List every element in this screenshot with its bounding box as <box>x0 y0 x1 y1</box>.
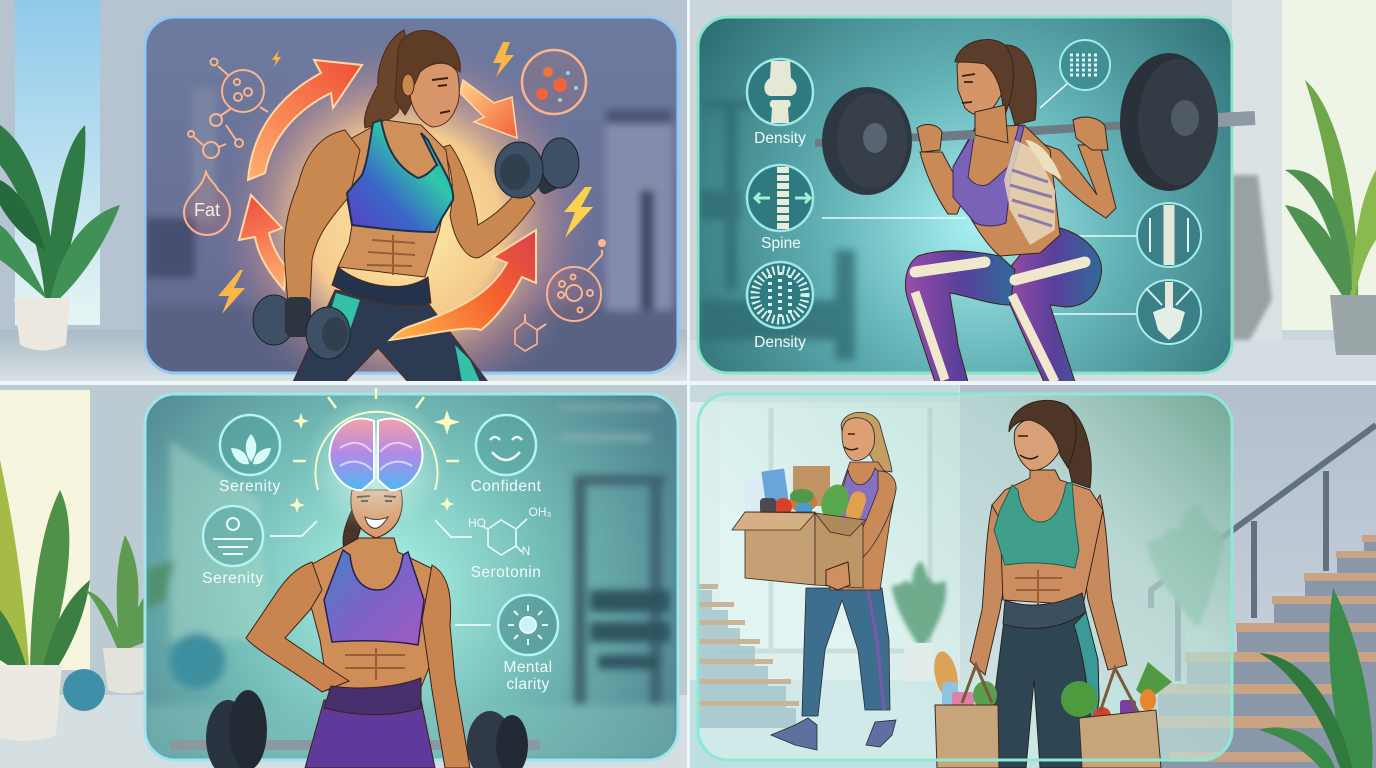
background: gym top left <box>0 0 688 382</box>
icon: fat droplet <box>184 172 230 235</box>
sports top <box>347 120 453 232</box>
stair railing <box>1151 425 1376 681</box>
plant: indoor center <box>892 562 946 645</box>
abs detail <box>367 235 415 275</box>
blurred gym equipment <box>146 51 676 372</box>
torso <box>293 538 447 690</box>
hand under box <box>826 562 850 590</box>
rays <box>293 388 459 461</box>
figure: woman with bags <box>970 400 1127 768</box>
plant pot <box>1330 295 1376 355</box>
bar across shoulders <box>940 128 1080 137</box>
floor <box>690 680 1190 768</box>
label: serenity: Serenity <box>202 570 264 587</box>
stairs right <box>1158 535 1376 768</box>
shoes <box>771 718 896 750</box>
window frame <box>720 408 930 651</box>
left arm <box>284 130 360 305</box>
label: spine: Spine <box>761 235 801 252</box>
icon: lotus serenity <box>219 415 281 495</box>
head <box>957 53 1003 115</box>
figure: woman with box <box>771 412 896 750</box>
groceries in box <box>745 466 868 523</box>
icon: serotonin molecule: HO <box>468 516 486 530</box>
icon: meditation serenity <box>202 506 264 587</box>
plant: top left <box>0 125 120 300</box>
icon: serotonin molecule: OH₃ <box>529 505 552 519</box>
leg stripes <box>325 293 480 382</box>
femurs <box>915 262 1085 280</box>
plant: foreground bottom right <box>1259 588 1373 768</box>
hair <box>1009 400 1076 468</box>
barbell <box>170 690 540 768</box>
legs <box>994 606 1099 768</box>
icon: sun mental clarity: clarity <box>506 676 550 693</box>
abs detail <box>1015 570 1062 605</box>
torso <box>992 470 1103 605</box>
panel border <box>145 394 678 760</box>
icon: compression arrows <box>1137 203 1201 267</box>
icon: cell circle bottom right <box>515 240 605 351</box>
panel border <box>698 394 1232 760</box>
icon: molecule top left <box>188 58 268 158</box>
icon: bone dots <box>1060 40 1110 90</box>
icon: glowing brain <box>289 388 460 532</box>
plant: top right <box>1285 80 1376 300</box>
panel border <box>145 17 678 373</box>
dumbbell: raised <box>495 138 579 198</box>
plant pot <box>14 298 70 350</box>
torso <box>830 462 896 590</box>
arms <box>970 495 1127 675</box>
right leg <box>1005 228 1102 382</box>
icon: serotonin molecule: N <box>522 544 530 558</box>
ponytail <box>1060 403 1091 488</box>
rib lines <box>1010 170 1054 226</box>
hair <box>841 412 892 472</box>
grocery bag left <box>930 649 999 768</box>
arrow: up right <box>248 60 362 180</box>
grocery bag right <box>1061 662 1172 768</box>
figure: smiling woman <box>246 490 470 768</box>
arrow: up left <box>239 195 286 290</box>
smile <box>365 517 388 528</box>
icon: smile confident <box>471 415 542 495</box>
icon: serotonin molecule <box>468 505 552 581</box>
label: confident: Confident <box>471 478 542 495</box>
eye and smile <box>1018 436 1038 459</box>
head <box>351 490 402 538</box>
leader lines <box>822 83 1137 314</box>
panel: mental wellbeing <box>145 388 678 768</box>
ponytail <box>343 510 362 552</box>
dumbbell: lowered <box>253 295 350 359</box>
label: fat: Fat <box>194 200 220 220</box>
eye and mouth <box>432 78 450 113</box>
hair <box>395 30 460 115</box>
face <box>410 63 459 127</box>
plant: indoor right <box>1146 505 1224 625</box>
waistband <box>1003 593 1086 628</box>
ponytail <box>364 30 412 128</box>
panel: everyday strength <box>698 394 1232 768</box>
sports top <box>834 468 882 520</box>
label: density: Density <box>754 130 806 147</box>
plant pot <box>0 665 62 741</box>
label: serenity: Serenity <box>219 478 281 495</box>
background: gym top right <box>690 0 1376 382</box>
label: serotonin: Serotonin <box>471 564 541 581</box>
panel: bone strength <box>698 17 1255 382</box>
label: mental clarity: Mental <box>504 659 552 676</box>
barbell <box>815 53 1255 195</box>
exercise ball <box>63 669 105 711</box>
icon: knee joint density <box>747 59 813 147</box>
sports top <box>324 550 424 645</box>
eyes <box>357 496 396 501</box>
sports top <box>953 125 1024 226</box>
panel: fat burning <box>145 17 678 415</box>
waistband <box>332 267 431 305</box>
sports top <box>994 482 1079 568</box>
icon: pelvis <box>1137 280 1201 344</box>
left leg <box>905 251 1015 382</box>
icon: cell circle top right <box>522 50 586 114</box>
leader lines <box>270 520 491 625</box>
head <box>842 418 874 460</box>
waistband <box>324 678 421 715</box>
eye and smile <box>844 434 858 450</box>
left arm on hip <box>246 562 349 692</box>
tibias <box>915 292 1055 382</box>
blurred gym background <box>145 405 678 760</box>
sparkles <box>289 410 460 513</box>
leg stripe <box>868 590 884 710</box>
abs detail <box>345 648 405 680</box>
legs <box>293 290 488 382</box>
background: gym bottom left <box>0 384 688 768</box>
plants: bottom left <box>0 460 150 680</box>
icon: bone density dots <box>747 262 813 351</box>
hair <box>955 39 1013 117</box>
ribcage <box>1004 140 1055 245</box>
torso <box>330 120 450 277</box>
label: density: Density <box>754 334 806 351</box>
arm <box>830 471 896 580</box>
icon: spine <box>747 165 813 252</box>
teal stripe <box>1074 612 1099 740</box>
right arm down <box>422 565 470 768</box>
stairs left <box>698 584 799 728</box>
cardboard box <box>732 512 865 588</box>
ponytail <box>1005 45 1036 125</box>
window <box>720 408 930 651</box>
treadmill <box>1232 175 1272 340</box>
eye and mouth <box>962 74 975 103</box>
torso <box>953 125 1060 256</box>
legs <box>802 588 890 716</box>
icon: lightning bolts <box>218 42 593 314</box>
neck <box>975 105 1008 143</box>
left forearm <box>920 152 965 214</box>
shoulder bone <box>1025 140 1062 180</box>
right arm <box>1040 143 1116 218</box>
plant pot <box>904 643 933 681</box>
arrow: down right <box>460 80 517 138</box>
ear <box>402 74 414 96</box>
arrow: up right lower <box>390 230 536 340</box>
head <box>1014 417 1060 470</box>
panel border <box>698 17 1232 373</box>
icon: hands on bar <box>917 117 1108 152</box>
right arm <box>440 145 535 258</box>
icon: sun mental clarity <box>498 595 558 693</box>
figure: woman with dumbbells <box>284 30 535 382</box>
figure: squatting woman <box>905 39 1116 382</box>
legs <box>305 700 435 768</box>
plant pot <box>103 648 145 694</box>
blurred gym rack <box>700 100 855 360</box>
background: room bottom right <box>690 384 1376 768</box>
plant pot <box>1186 630 1206 652</box>
